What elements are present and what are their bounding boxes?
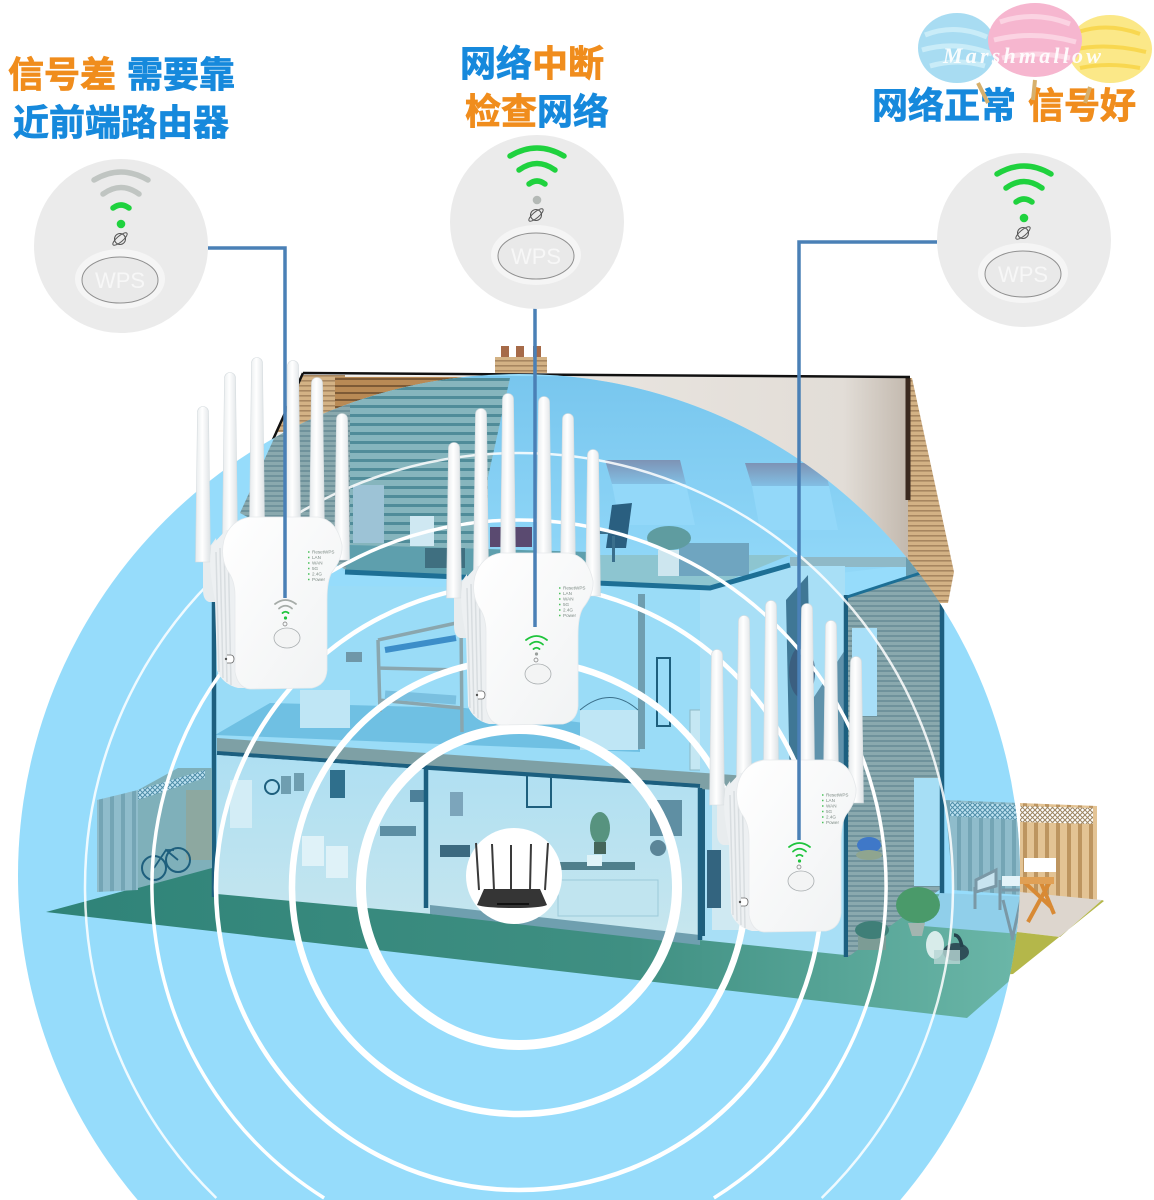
extender right: good signal bbox=[710, 600, 864, 932]
WPS button bbox=[491, 225, 581, 285]
attic bbox=[274, 376, 908, 559]
heading left: weak signal, move closer to router bbox=[8, 54, 235, 143]
LED labels: 5G bbox=[826, 809, 833, 814]
wifi arcs bbox=[94, 172, 148, 228]
floor slab bbox=[217, 738, 736, 790]
wifi indicator bbox=[789, 843, 810, 869]
LED labels: 2.4G bbox=[826, 814, 836, 820]
tinted gable end bbox=[906, 557, 942, 606]
LED labels: WAN bbox=[826, 804, 837, 808]
ground floor rooms bbox=[217, 755, 700, 940]
planet icon bbox=[1014, 225, 1032, 241]
planet icon bbox=[111, 231, 129, 247]
LED labels: LAN bbox=[563, 591, 572, 596]
LED dots bbox=[559, 588, 560, 616]
WPS button bbox=[274, 628, 300, 648]
second floor furniture bbox=[300, 594, 740, 770]
heading middle: network interrupted: 检查网络 bbox=[465, 91, 609, 132]
WPS button: WPS bbox=[95, 268, 145, 293]
main router bbox=[466, 828, 562, 924]
staircase hall bbox=[700, 566, 845, 955]
extender middle: network down bbox=[446, 394, 600, 725]
LED labels: LAN bbox=[826, 798, 835, 803]
LED labels: 5G bbox=[312, 566, 319, 571]
LED labels bbox=[563, 586, 585, 618]
rear fence bbox=[945, 800, 1020, 895]
wifi indicator bbox=[526, 636, 547, 662]
WPS button: WPS bbox=[998, 262, 1048, 287]
house parts outside the signal circle bbox=[240, 373, 1104, 975]
lawn bbox=[46, 868, 1102, 1018]
LED dots bbox=[822, 795, 824, 822]
logo clothes-pegs overlapping heading bbox=[978, 80, 1090, 103]
heading right: network normal, good signal bbox=[872, 85, 1136, 126]
WPS button bbox=[75, 249, 165, 309]
callout circle left: weak signal bbox=[34, 159, 208, 333]
extender left: weak signal bbox=[196, 358, 350, 689]
wifi arcs bbox=[997, 166, 1051, 222]
LED labels: ResetWPS bbox=[563, 586, 585, 590]
rooftop chimney bbox=[495, 346, 547, 373]
heading right: network normal, good signal: 信号好 bbox=[1028, 85, 1136, 126]
LED labels: 5G bbox=[563, 602, 570, 607]
heading left: weak signal, move closer to router: 需要靠 bbox=[127, 54, 235, 95]
LED labels bbox=[826, 792, 848, 825]
dog bbox=[926, 931, 969, 964]
left fence and bicycle bbox=[97, 768, 212, 892]
marshmallow watermark logo bbox=[918, 3, 1152, 83]
LED labels: Power bbox=[312, 577, 325, 582]
LED labels bbox=[312, 550, 334, 582]
ground floor walls bbox=[214, 590, 846, 957]
WPS button bbox=[978, 243, 1068, 303]
callout circle right: good signal bbox=[937, 153, 1111, 327]
heading middle: network interrupted bbox=[460, 43, 609, 132]
signal rings bbox=[85, 453, 953, 1198]
LED labels: Power bbox=[563, 613, 576, 618]
ground floor furniture bbox=[230, 770, 682, 916]
wifi indicator bbox=[275, 600, 296, 626]
patio bbox=[924, 893, 1020, 934]
second floor bbox=[212, 585, 845, 790]
LED labels: LAN bbox=[312, 555, 321, 560]
LED labels: WAN bbox=[312, 560, 323, 566]
LED labels: ResetWPS bbox=[826, 792, 848, 798]
planet icon bbox=[527, 207, 545, 223]
LED labels: WAN bbox=[563, 596, 574, 602]
brick side wall bbox=[848, 566, 942, 957]
garden table and chairs bbox=[975, 870, 1024, 940]
potted plant bbox=[855, 887, 940, 950]
heading right: network normal, good signal: 网络正常 bbox=[872, 85, 1016, 126]
LED dots bbox=[308, 552, 310, 580]
wifi arcs bbox=[510, 148, 564, 204]
attic brick wall bbox=[240, 404, 350, 570]
heading left: weak signal, move closer to router: 近前端路由器 bbox=[13, 102, 229, 143]
LED labels: 2.4G bbox=[563, 608, 573, 612]
attic furniture bbox=[345, 460, 906, 588]
marshmallow watermark logo: Marshmallow bbox=[942, 43, 1104, 68]
WPS button bbox=[525, 664, 551, 684]
signal coverage circle bbox=[18, 374, 1020, 1200]
WPS button bbox=[788, 871, 814, 891]
LED labels: Power bbox=[826, 820, 839, 825]
WPS button: WPS bbox=[511, 244, 561, 269]
callout circle middle: network down bbox=[450, 135, 624, 309]
heading left: weak signal, move closer to router: 信号差 bbox=[8, 54, 116, 95]
bunk bed bbox=[378, 622, 462, 732]
attic slatted wall bbox=[350, 378, 510, 552]
LED labels: ResetWPS bbox=[312, 550, 334, 554]
house tinted by signal bbox=[46, 375, 1102, 1018]
hanging flower basket bbox=[856, 837, 882, 860]
connector lines bbox=[208, 242, 937, 840]
heading middle: network interrupted: 网络中断 bbox=[460, 43, 604, 84]
LED labels: 2.4G bbox=[312, 572, 322, 576]
